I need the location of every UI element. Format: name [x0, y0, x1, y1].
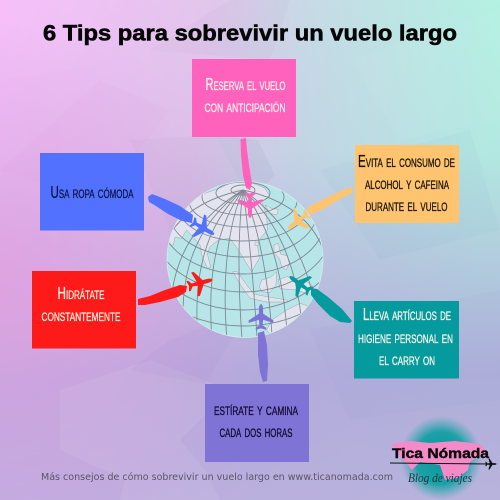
continents — [167, 182, 313, 338]
globe grid — [168, 182, 322, 337]
arrow: red — [138, 268, 216, 305]
footer note: Más consejos de cómo sobrevivir un vuelo largo en www.ticanomada.com — [41, 471, 393, 483]
globe — [166, 181, 324, 338]
panel: evita alcohol y cafeina: alcohol y cafeina — [365, 173, 449, 193]
panel: hidrátate: Hidrátate — [58, 283, 104, 303]
arrow: teal — [282, 266, 352, 323]
panel: lleva artículos: el carry on — [379, 349, 435, 369]
title: 6 Tips para sobrevivir un vuelo largo — [43, 20, 457, 46]
arrow: orange — [280, 187, 353, 239]
panel: usa ropa cómoda: Usa ropa cómoda — [50, 182, 134, 202]
panel: usa ropa cómoda — [40, 153, 144, 230]
panel: evita alcohol y cafeina: durante el vuelo — [366, 195, 448, 215]
panel: estírate y camina: cada dos horas — [220, 421, 292, 441]
arrow: purple — [249, 304, 273, 382]
panel: evita alcohol y cafeina: Evita el consumo de — [358, 151, 455, 171]
panel: lleva artículos: higiene personal en — [358, 327, 453, 347]
panel: reserva el vuelo: con anticipación — [204, 96, 286, 116]
panel: lleva artículos: Lleva artículos de — [363, 304, 451, 324]
panel: hidrátate: constantemente — [42, 305, 120, 325]
logo: Tica Nómada: Blog de viajes — [408, 470, 472, 485]
panel: lleva artículos — [354, 301, 459, 378]
panel: hidrátate — [32, 271, 136, 348]
panel: evita alcohol y cafeina — [355, 145, 459, 223]
logo: Tica Nómada: Tica Nómada — [392, 445, 489, 461]
arrow: blue — [148, 194, 220, 245]
panel: reserva el vuelo: Reserva el vuelo — [206, 74, 286, 94]
arrow: pink — [238, 138, 262, 218]
logo: Tica Nómada — [390, 416, 497, 500]
panel: estírate y camina: estírate y camina — [214, 399, 298, 419]
panel: reserva el vuelo — [192, 59, 296, 137]
panel: estírate y camina — [205, 384, 309, 462]
